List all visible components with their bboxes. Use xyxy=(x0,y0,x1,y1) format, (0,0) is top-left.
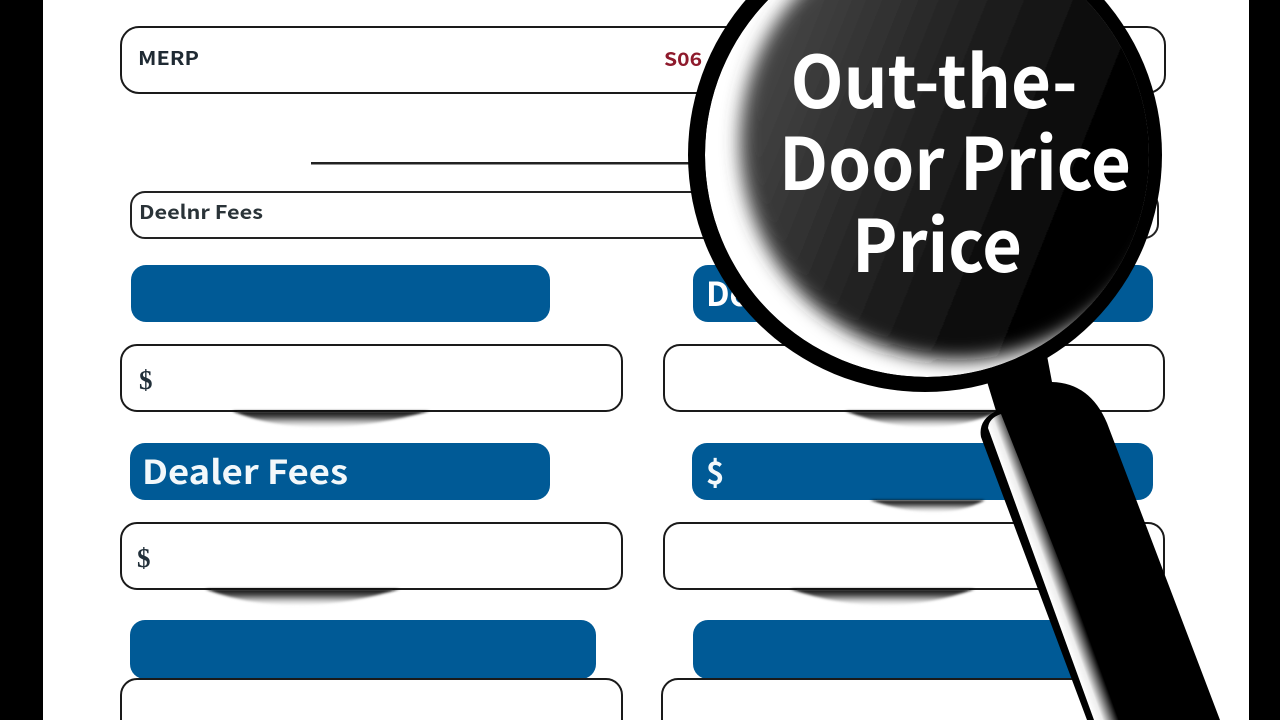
handle highlight xyxy=(988,414,1122,720)
MSRP amount: S06 xyxy=(664,45,702,72)
shadow under box, row 2 left xyxy=(205,589,400,605)
input box, row 2 right xyxy=(664,523,1164,589)
blue bar, row 3 left xyxy=(130,620,596,679)
input box, row 3 left xyxy=(121,679,622,720)
lens heading: Door Price xyxy=(779,106,1131,211)
blue bar, row 2 left xyxy=(130,443,550,500)
input box, row 3 right xyxy=(662,679,1162,720)
input box, row 1 right xyxy=(664,345,1164,411)
lens glass xyxy=(705,0,1176,377)
lens dark centre xyxy=(740,0,1176,360)
handle xyxy=(981,345,1220,720)
blue header bar, row 1 right xyxy=(693,265,1153,322)
lens heading: Price xyxy=(852,188,1022,293)
partial bar label: De xyxy=(706,268,749,316)
shadow under bar, row 2 right xyxy=(870,500,985,512)
dollar sign: $ xyxy=(139,365,152,395)
input box, row 1 left xyxy=(121,345,622,411)
right black side bar xyxy=(1249,0,1280,720)
shadow under box, row 2 right xyxy=(790,589,975,605)
MSRP label: MERP xyxy=(138,44,199,71)
blue bar, row 2 right xyxy=(692,443,1153,500)
dealer fees bar label: Dealer Fees xyxy=(142,446,348,494)
separator line xyxy=(311,162,711,164)
dollar sign: $ xyxy=(137,543,150,573)
shadow under box, row 1 right xyxy=(845,411,1000,427)
magnifying glass xyxy=(688,0,1220,720)
left black side bar xyxy=(0,0,43,720)
dollar sign: $ xyxy=(706,448,724,493)
lens rim xyxy=(688,0,1162,392)
input box, row 2 left xyxy=(121,523,622,589)
MSRP row xyxy=(121,27,1165,93)
lens heading: Out-the- xyxy=(790,24,1078,129)
shadow under box, row 1 left xyxy=(232,411,430,427)
lens heading xyxy=(779,24,1131,293)
blue header bar, row 1 left xyxy=(131,265,550,322)
dealer fees outlined row xyxy=(131,192,1158,238)
dealer fees outlined label: Deelnr Fees xyxy=(139,198,263,225)
blue bar, row 3 right xyxy=(693,620,1113,679)
